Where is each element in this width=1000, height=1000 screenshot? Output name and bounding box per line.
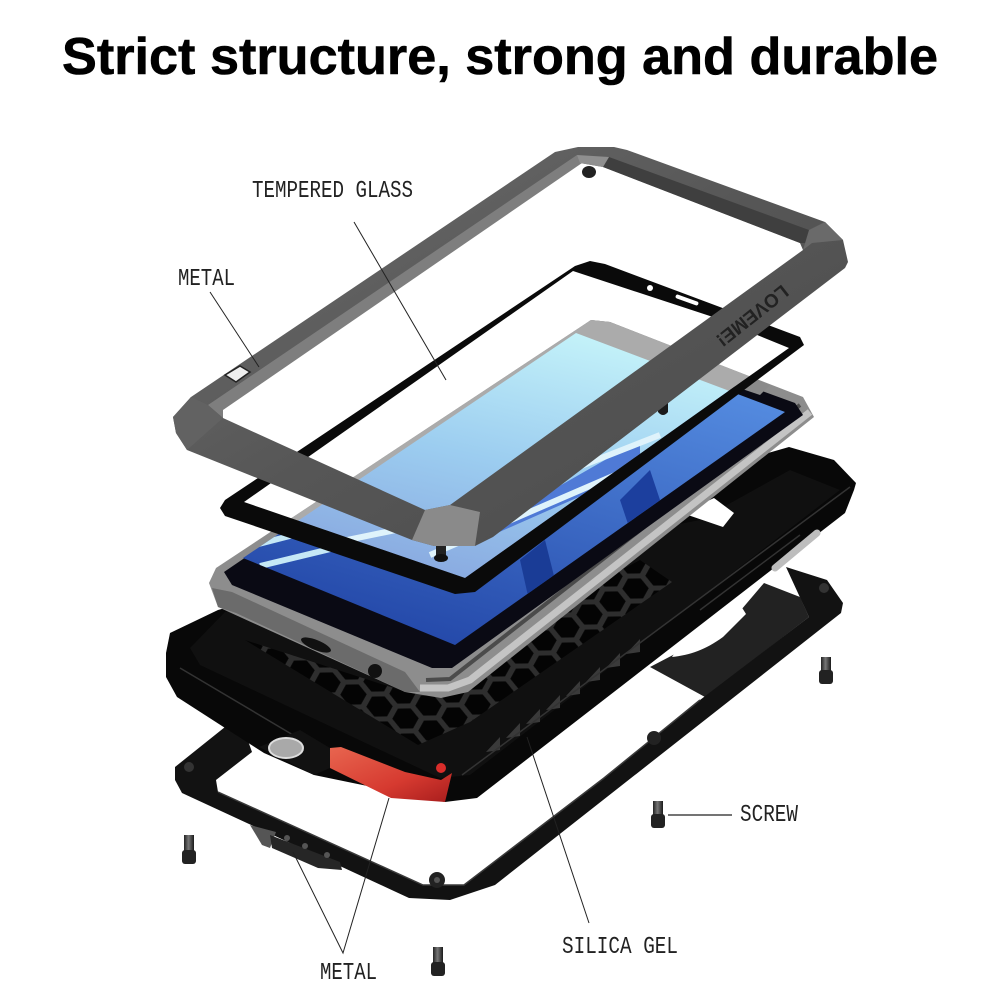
leader: metal top xyxy=(210,292,259,367)
corner highlight right xyxy=(803,222,843,250)
red latch xyxy=(330,747,452,802)
triangle strip xyxy=(486,639,640,752)
corner highlight top xyxy=(577,155,609,167)
textured inner bevel xyxy=(208,155,582,418)
label: metal bottom: METAL xyxy=(320,960,377,987)
usb port and jack xyxy=(299,634,382,678)
screw middle xyxy=(651,801,665,828)
phone top rim xyxy=(560,320,770,395)
top metal frame xyxy=(173,147,848,546)
camera opening xyxy=(682,498,734,527)
leader: silica gel xyxy=(527,737,589,923)
lighter screen behind glass xyxy=(292,320,749,578)
corner highlight bottom xyxy=(412,505,480,546)
leader: screw xyxy=(668,814,732,816)
title: Strict structure, strong and durable xyxy=(62,28,938,86)
side switch xyxy=(775,533,817,568)
label: tempered glass: TEMPERED GLASS xyxy=(252,178,413,205)
label: metal top: METAL xyxy=(178,266,235,293)
right inner bevel xyxy=(603,157,812,243)
phone bottom edge xyxy=(212,588,420,692)
wallpaper streaks xyxy=(259,470,660,594)
screw bottom xyxy=(431,947,445,976)
phone xyxy=(209,320,814,698)
front camera xyxy=(647,285,653,291)
frame screw xyxy=(582,166,596,178)
screw left xyxy=(182,835,196,864)
honeycomb lining xyxy=(245,560,672,745)
tempered glass pin xyxy=(658,400,668,415)
black bezel xyxy=(224,326,803,668)
label: silica gel: SILICA GEL xyxy=(562,934,678,961)
screw under glass xyxy=(434,545,448,562)
leader: tempered glass xyxy=(354,222,446,380)
screw right xyxy=(819,657,833,684)
tempered glass xyxy=(220,261,804,594)
case corner block xyxy=(259,730,330,775)
case inner tray xyxy=(190,470,840,778)
metal rim xyxy=(420,412,810,688)
leader: metal bottom xyxy=(293,798,389,953)
brand engraving: LOVEME! xyxy=(711,280,792,350)
silica gel case xyxy=(166,447,856,802)
earpiece xyxy=(675,294,699,306)
strap notch xyxy=(225,366,250,382)
label: screw: SCREW xyxy=(740,802,798,829)
silver button xyxy=(269,738,303,758)
bottom metal frame xyxy=(175,567,843,900)
corner highlight left xyxy=(173,397,223,450)
dark screen xyxy=(243,333,785,645)
